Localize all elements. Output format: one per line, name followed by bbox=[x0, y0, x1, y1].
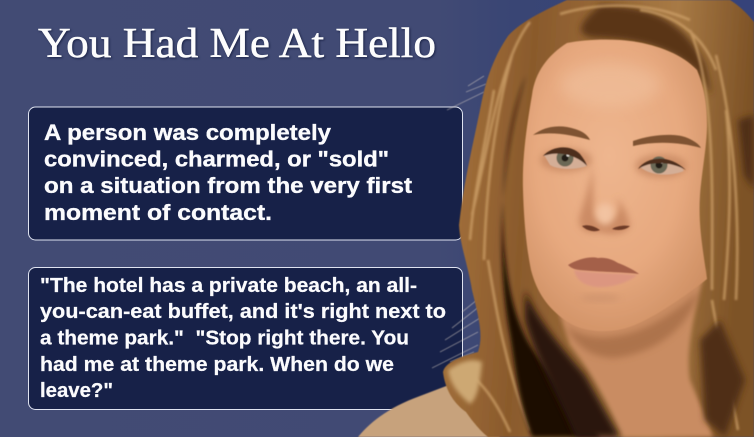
left brow bbox=[533, 126, 590, 140]
panel: definition bbox=[28, 107, 462, 240]
lower lip bbox=[574, 270, 637, 287]
hair highlights bbox=[470, 6, 738, 432]
definition text: convinced, charmed, or "sold" bbox=[44, 146, 389, 172]
chin shadow bbox=[580, 294, 620, 302]
nose shadow bbox=[579, 165, 630, 234]
hair wisps bbox=[432, 76, 486, 368]
dark hair behind parting bbox=[581, 5, 712, 95]
neck bbox=[555, 270, 713, 437]
nose highlight bbox=[596, 203, 614, 225]
example text: you-can-eat buffet, and it's right next to bbox=[40, 301, 446, 323]
example text: a theme park." "Stop right there. You bbox=[40, 328, 409, 350]
hair shadow right bbox=[700, 115, 754, 437]
right brow bbox=[633, 135, 701, 148]
blonde shoulder tips bbox=[448, 360, 482, 404]
definition text bbox=[44, 120, 413, 225]
left eye bbox=[543, 147, 587, 169]
right eye bbox=[638, 156, 686, 175]
portrait of woman bbox=[358, 0, 754, 437]
hair bbox=[443, 0, 754, 437]
nostrils bbox=[582, 225, 630, 231]
example text: had me at theme park. When do we bbox=[40, 354, 394, 376]
hair shadow left bbox=[502, 75, 600, 437]
shoulder bbox=[358, 380, 500, 437]
eye sockets bbox=[540, 148, 687, 178]
example text: leave?" bbox=[40, 380, 113, 402]
definition text: on a situation from the very first bbox=[44, 173, 413, 198]
upper lip bbox=[568, 257, 639, 274]
forehead highlight bbox=[560, 63, 660, 107]
definition text: moment of contact. bbox=[44, 200, 272, 225]
neck shadow bbox=[565, 290, 700, 358]
title: You Had Me At Hello bbox=[38, 21, 436, 67]
example text bbox=[40, 275, 446, 402]
definition text: A person was completely bbox=[44, 120, 332, 145]
face bbox=[523, 40, 707, 331]
example text: "The hotel has a private beach, an all- bbox=[40, 275, 417, 297]
panel: example dialogue bbox=[28, 268, 462, 410]
